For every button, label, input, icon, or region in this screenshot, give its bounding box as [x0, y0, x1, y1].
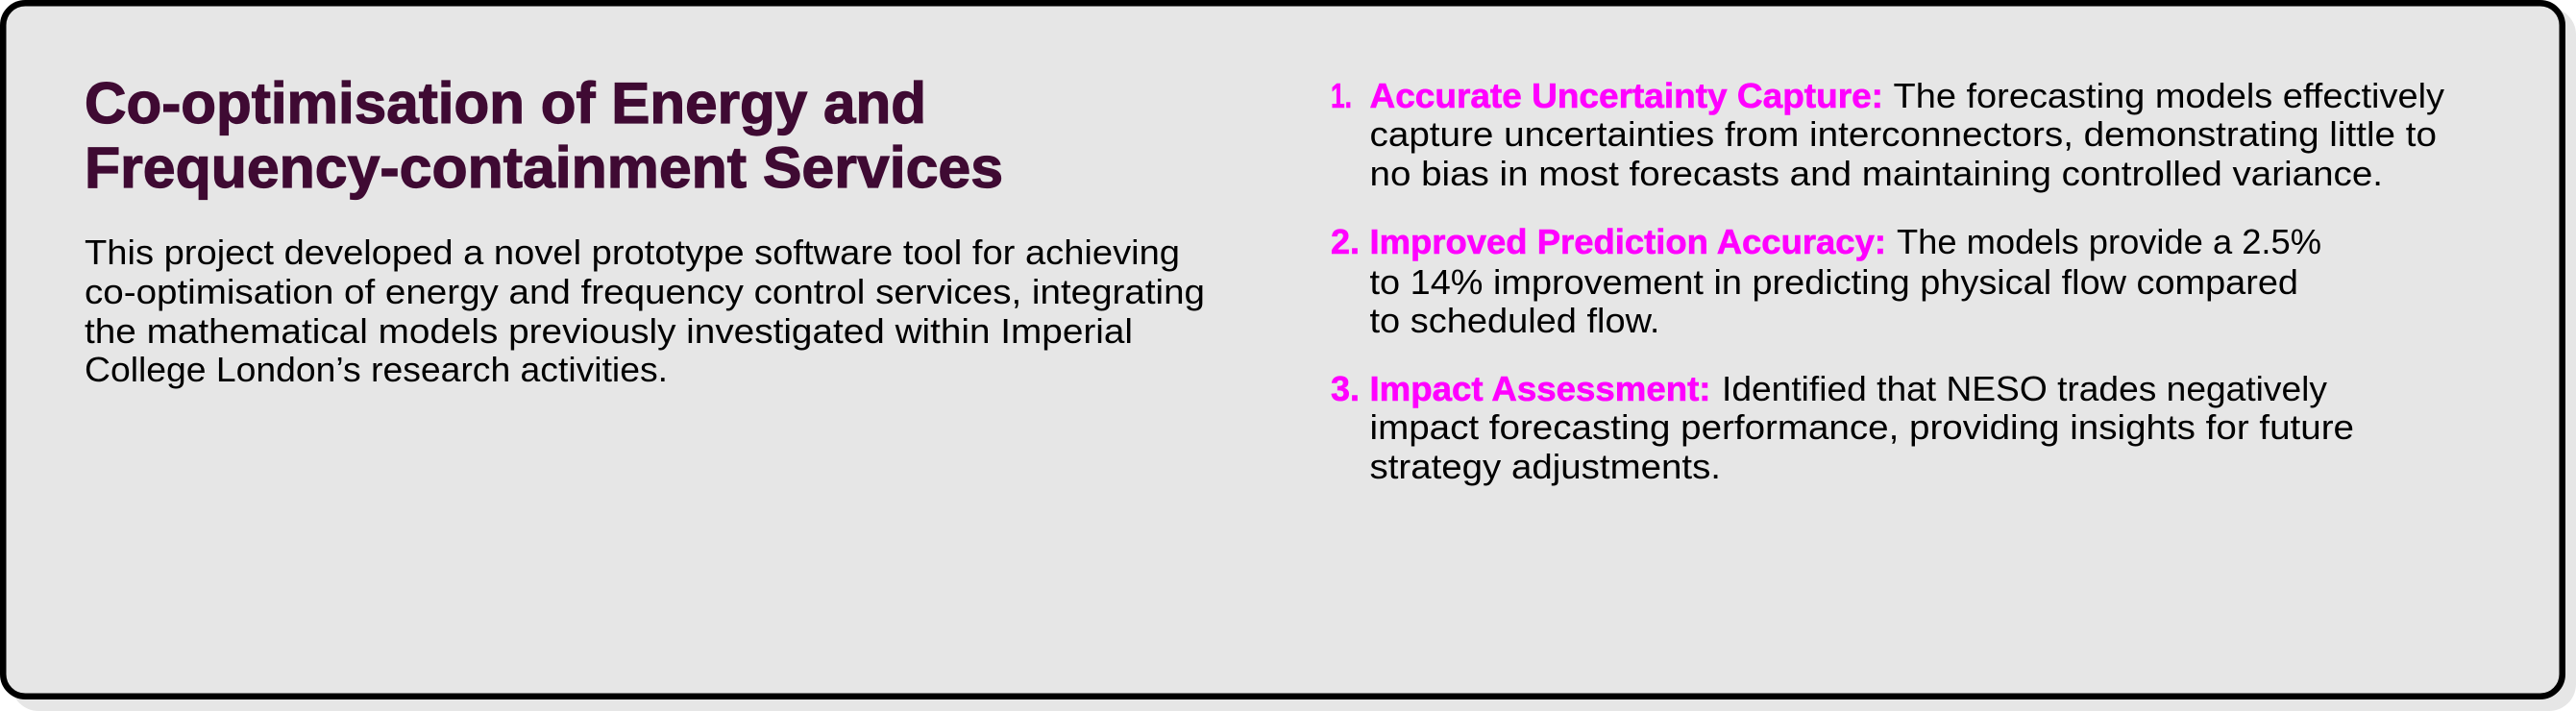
text block: project description: [85, 233, 1205, 389]
list item 3: impact assessment: impact forecasting performance, providing insights for future: [1370, 407, 2354, 447]
list item 3: impact assessment: [1331, 369, 2354, 486]
panel: left column: [85, 71, 1205, 389]
text block: project description: co-optimisation of energy and frequency control services, integrating: [85, 272, 1205, 311]
list item 2: improved prediction accuracy: to scheduled flow.: [1370, 301, 1660, 340]
list item 1: accurate uncertainty capture: capture uncertainties from interconnectors, demonstrating little to: [1370, 114, 2437, 154]
title: [85, 71, 1003, 200]
list item 2: improved prediction accuracy: Improved Prediction Accuracy:: [1370, 222, 1886, 261]
list item 3: impact assessment: Impact Assessment:: [1370, 369, 1710, 408]
list item 1: accurate uncertainty capture: no bias in most forecasts and maintaining controlled variance.: [1370, 154, 2383, 193]
panel: numbered findings: [1331, 76, 2444, 486]
title: Co-optimisation of Energy and: [85, 71, 926, 135]
text block: project description: the mathematical models previously investigated within Imperial: [85, 311, 1133, 351]
title: Frequency-containment Services: [85, 135, 1003, 200]
list item 2: improved prediction accuracy: 2.: [1331, 222, 1360, 261]
list item 2: improved prediction accuracy: The models provide a 2.5%: [1897, 222, 2321, 261]
list item 3: impact assessment: strategy adjustments.: [1370, 447, 1721, 486]
list item 2: improved prediction accuracy: [1331, 222, 2321, 340]
list item 1: accurate uncertainty capture: [1331, 76, 2444, 193]
list item 3: impact assessment: Identified that NESO trades negatively: [1722, 369, 2327, 408]
text block: project description: This project developed a novel prototype software tool for achieving: [85, 233, 1180, 272]
list item 3: impact assessment: 3.: [1331, 369, 1360, 408]
text block: project description: College London’s research activities.: [85, 350, 668, 389]
list item 1: accurate uncertainty capture: Accurate Uncertainty Capture:: [1370, 76, 1883, 115]
list item 1: accurate uncertainty capture: 1.: [1331, 76, 1352, 115]
list item 1: accurate uncertainty capture: The forecasting models effectively: [1893, 76, 2444, 115]
list item 2: improved prediction accuracy: to 14% improvement in predicting physical flow compared: [1370, 262, 2298, 302]
